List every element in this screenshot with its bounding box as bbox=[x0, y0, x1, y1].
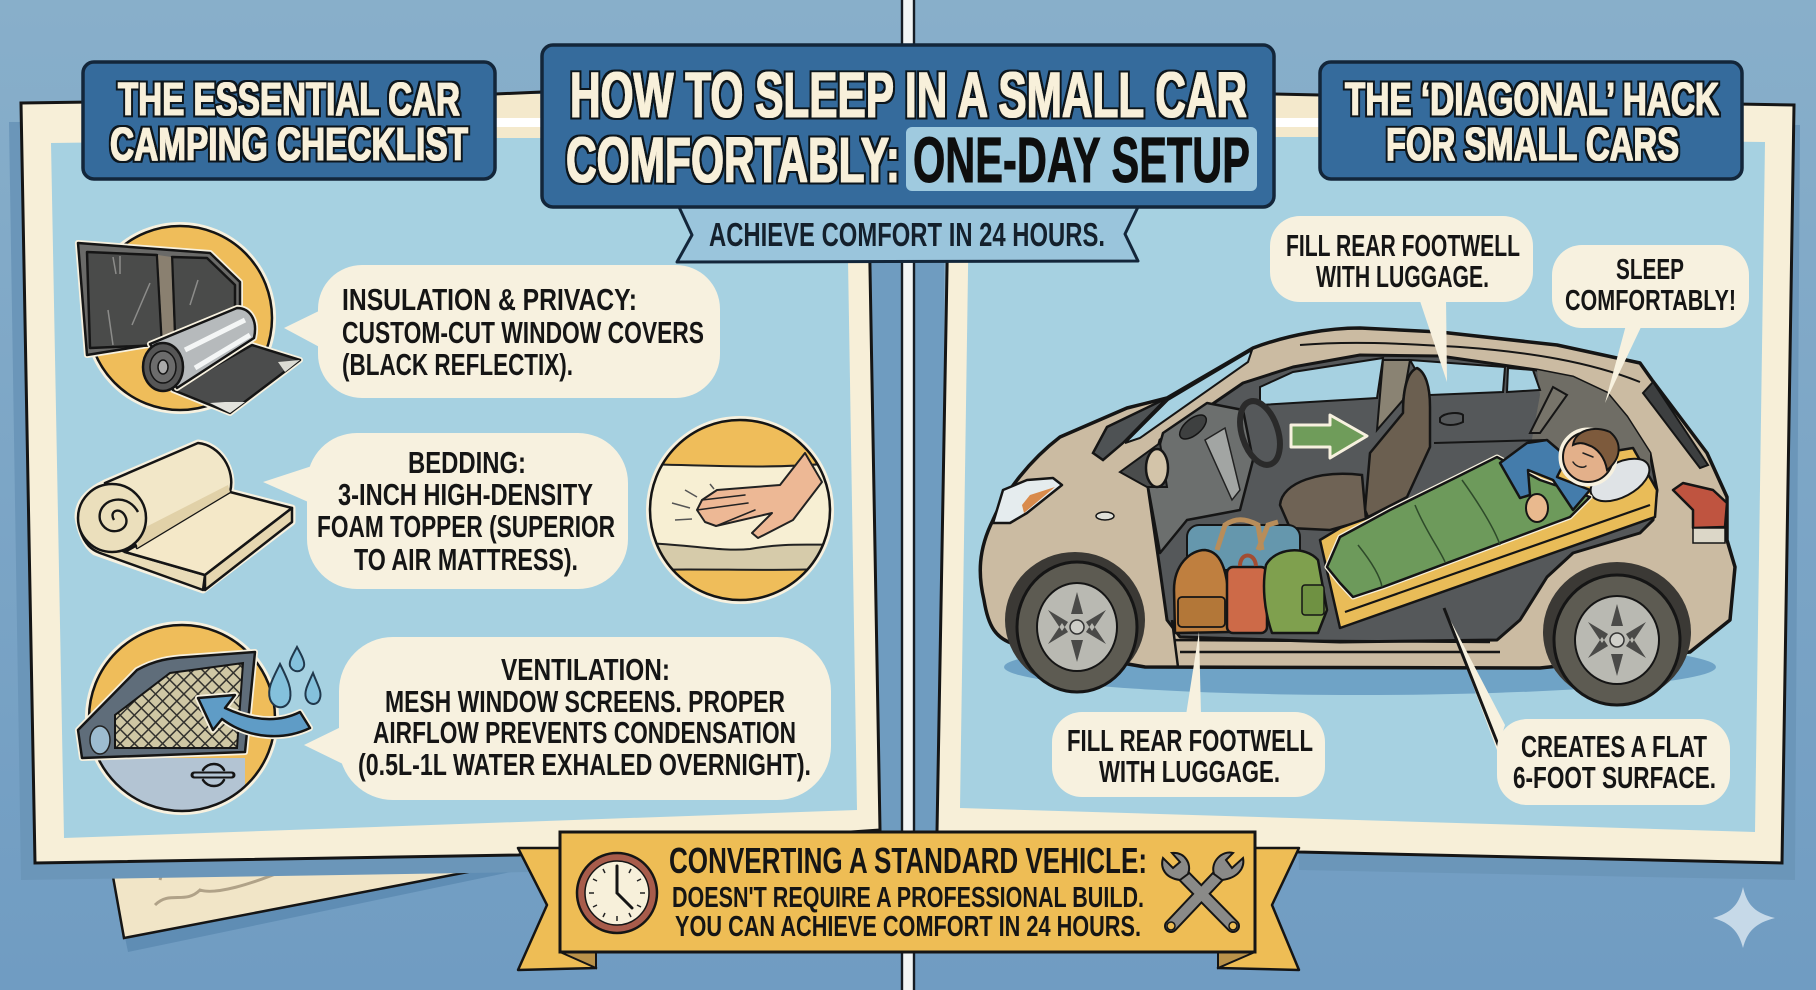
luggage bbox=[1174, 520, 1327, 633]
banner: YOU CAN ACHIEVE COMFORT IN 24 HOURS. bbox=[675, 911, 1141, 943]
center divider bbox=[871, 0, 944, 990]
roof shading bbox=[1300, 343, 1640, 382]
heading: essential checklist: THE ESSENTIAL CAR bbox=[118, 73, 460, 125]
interior opening bbox=[1148, 355, 1657, 642]
callout: ventilation: VENTILATION: bbox=[501, 652, 670, 687]
title: COMFORTABLY: bbox=[566, 124, 900, 196]
callout: bedding: BEDDING: bbox=[408, 445, 526, 480]
title: ONE-DAY SETUP bbox=[913, 124, 1250, 196]
callout: sleep comfortably: SLEEP bbox=[1616, 254, 1684, 286]
subtitle ribbon bbox=[677, 207, 1138, 262]
callout: bedding bbox=[263, 433, 628, 589]
green arrow bbox=[1291, 415, 1367, 458]
banner left tail bbox=[518, 848, 596, 970]
headlight bbox=[993, 478, 1062, 523]
callout: fill rear footwell top bbox=[1270, 216, 1533, 382]
mirror bbox=[1120, 443, 1167, 487]
sleeping bag bbox=[1327, 457, 1590, 597]
lower loose paper bbox=[110, 831, 530, 952]
windows bbox=[1260, 358, 1383, 405]
pillars bbox=[1377, 360, 1410, 430]
banner right tail bbox=[1218, 848, 1299, 970]
person torso bbox=[1500, 440, 1590, 510]
callout: fill rear footwell top: WITH LUGGAGE. bbox=[1316, 259, 1489, 294]
callout: fill rear footwell bottom bbox=[1052, 632, 1325, 797]
connecting strip left bbox=[495, 92, 542, 138]
icon: clock bbox=[577, 853, 657, 933]
title: HOW TO SLEEP IN A SMALL CAR bbox=[570, 59, 1247, 131]
callout: ventilation: MESH WINDOW SCREENS. PROPER bbox=[385, 684, 785, 719]
heading: essential checklist: CAMPING CHECKLIST bbox=[110, 118, 468, 170]
windshield sliver bbox=[1125, 350, 1252, 443]
callout: fill rear footwell bottom: WITH LUGGAGE. bbox=[1099, 754, 1280, 789]
callout: bedding: 3-INCH HIGH-DENSITY bbox=[338, 477, 593, 512]
heading: diagonal hack: FOR SMALL CARS bbox=[1386, 118, 1679, 170]
banner: DOESN'T REQUIRE A PROFESSIONAL BUILD. bbox=[672, 882, 1144, 914]
icon: crossed wrenches bbox=[1162, 853, 1243, 930]
sill lines bbox=[1172, 620, 1500, 667]
banner bbox=[518, 832, 1299, 970]
door details bbox=[1434, 413, 1545, 443]
callout: sleep comfortably: COMFORTABLY! bbox=[1565, 285, 1736, 317]
icon: foam roll bbox=[78, 443, 292, 590]
heading: diagonal hack bbox=[1320, 62, 1742, 179]
foam plank bbox=[1320, 448, 1657, 628]
icon: mesh window with airflow arrow and droplets bbox=[78, 620, 321, 820]
callout: insulation and privacy: CUSTOM-CUT WINDOW COVERS bbox=[342, 315, 704, 350]
rear wheel bbox=[1543, 562, 1691, 705]
callout: sleep comfortably bbox=[1552, 245, 1749, 403]
title bbox=[542, 45, 1274, 207]
subtitle ribbon: ACHIEVE COMFORT IN 24 HOURS. bbox=[709, 216, 1105, 253]
icon: hand pressing foam bbox=[646, 416, 834, 604]
callout: ventilation: (0.5L-1L WATER EXHALED OVERNIGHT). bbox=[358, 747, 811, 782]
car body bbox=[980, 328, 1735, 668]
rear quarter interior bbox=[1530, 370, 1650, 470]
connecting strip right bbox=[1274, 94, 1320, 137]
door handle bbox=[1096, 512, 1114, 520]
callout: bedding: TO AIR MATTRESS). bbox=[354, 542, 578, 577]
callout: ventilation bbox=[304, 637, 831, 800]
icon: sparkle watermark bbox=[1713, 887, 1775, 948]
front seat bbox=[1365, 368, 1430, 517]
car shadow bbox=[1004, 639, 1716, 695]
icon: window cover and reflectix roll bbox=[78, 222, 300, 414]
taillight bbox=[1673, 483, 1727, 528]
callout: insulation and privacy: (BLACK REFLECTIX). bbox=[342, 347, 573, 382]
callout: ventilation: AIRFLOW PREVENTS CONDENSATION bbox=[373, 715, 796, 750]
callout: insulation and privacy: INSULATION & PRIVACY: bbox=[342, 282, 637, 317]
illustration: small car with diagonal bed bbox=[980, 328, 1735, 705]
panel: diagonal hack paper bbox=[937, 96, 1800, 880]
dashboard bbox=[1148, 403, 1253, 553]
rear window strip bbox=[1643, 382, 1708, 468]
banner body bbox=[560, 832, 1255, 952]
callout: creates flat surface: CREATES A FLAT bbox=[1521, 729, 1707, 764]
callout: creates flat surface bbox=[1444, 608, 1730, 805]
front wheel bbox=[1005, 552, 1145, 692]
callout: insulation and privacy bbox=[284, 265, 720, 398]
banner: CONVERTING A STANDARD VEHICLE: bbox=[669, 840, 1147, 881]
callout: fill rear footwell bottom: FILL REAR FOOTWELL bbox=[1067, 723, 1313, 758]
heading: essential checklist bbox=[83, 62, 495, 179]
panel: checklist paper bbox=[9, 96, 880, 880]
callout: bedding: FOAM TOPPER (SUPERIOR bbox=[317, 509, 615, 544]
callout: creates flat surface: 6-FOOT SURFACE. bbox=[1513, 760, 1716, 795]
callout: fill rear footwell top: FILL REAR FOOTWELL bbox=[1286, 228, 1520, 263]
pillow bbox=[1584, 450, 1656, 510]
head bbox=[1562, 431, 1614, 483]
